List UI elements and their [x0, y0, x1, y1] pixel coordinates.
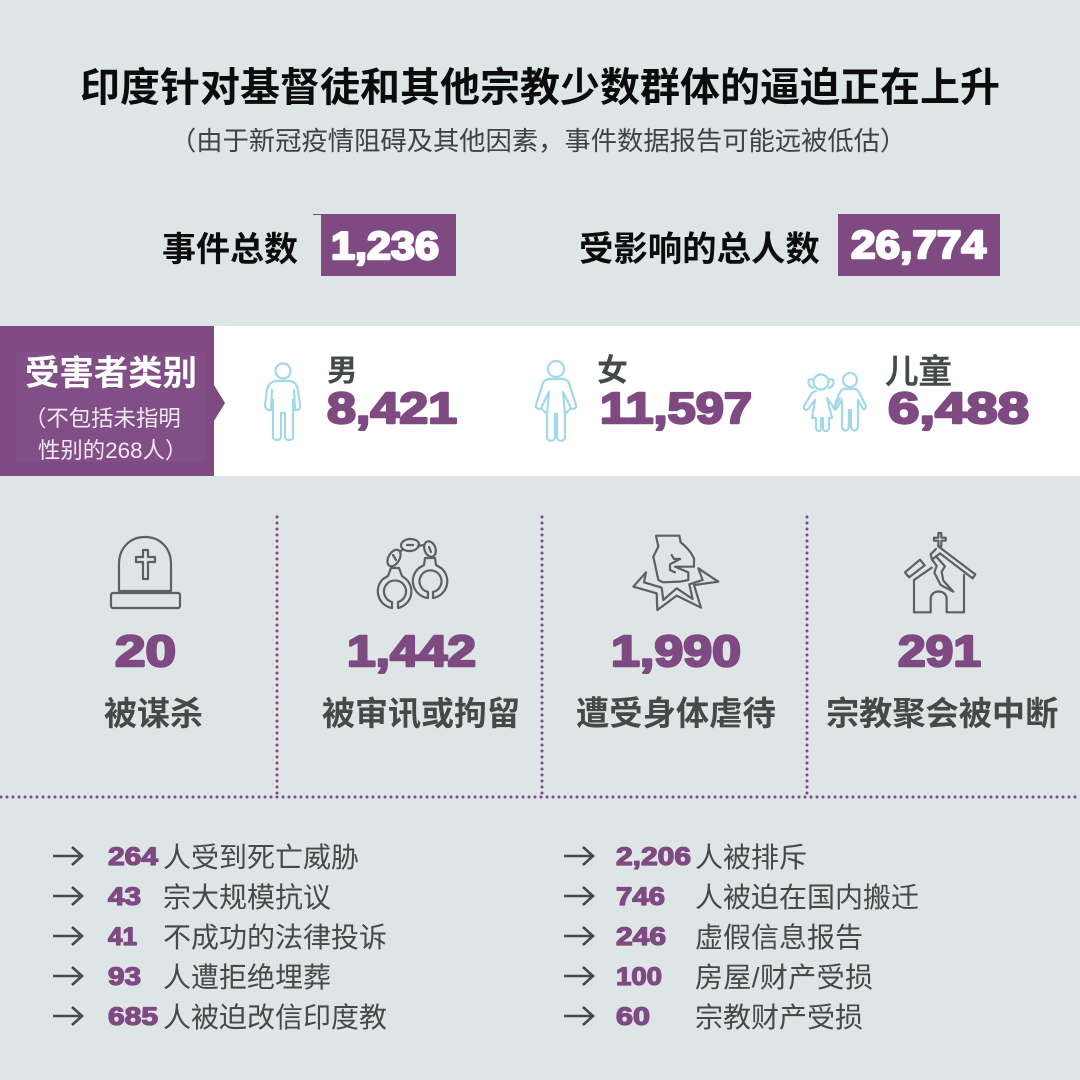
row: internally displaced: 746 [616, 883, 665, 911]
abuse label: 遭受身体虐待 [576, 696, 776, 733]
list: right column [564, 842, 919, 1033]
total incidents value: 1,236 [331, 225, 439, 268]
row: forced conversion: 685 [108, 1003, 158, 1031]
row: death threats: 人受到死亡威胁 [163, 842, 359, 873]
row: internally displaced [564, 882, 919, 913]
row: forced conversion: 人被迫改信印度教 [163, 1002, 387, 1033]
stat: physical abuse [576, 536, 776, 733]
killed label: 被谋杀 [104, 695, 203, 732]
icon: cracked church [905, 533, 975, 612]
gatherings label: 宗教聚会被中断 [826, 696, 1058, 733]
icon: fist impact [633, 536, 718, 610]
purple category tab [0, 326, 225, 476]
row: homes damaged: 房屋/财产受损 [695, 962, 873, 993]
male value: 8,421 [327, 384, 457, 433]
panel: victim categories [0, 326, 1080, 476]
total people affected [579, 214, 1000, 276]
icon: children [804, 373, 866, 431]
list: left column [53, 842, 387, 1033]
total people value box [838, 214, 1000, 276]
stat: interrogated or detained [322, 538, 520, 732]
inner tab tint [16, 352, 205, 462]
row: internally displaced: 人被迫在国内搬迁 [695, 882, 919, 913]
children label: 儿童 [885, 354, 952, 391]
row: failed complaints [53, 922, 387, 953]
total incidents label: 事件总数 [162, 231, 298, 269]
icon: man [265, 364, 300, 440]
row: religious property damaged: 宗教财产受损 [695, 1002, 863, 1033]
total incidents value box [313, 214, 456, 276]
row: death threats: 264 [108, 843, 158, 871]
row: death threats [53, 842, 359, 873]
row: mass protests [53, 882, 331, 913]
gatherings value: 291 [898, 627, 981, 676]
row: ostracised: 2,206 [616, 843, 691, 871]
detained value: 1,442 [347, 627, 476, 676]
row: mass protests: 宗大规模抗议 [163, 882, 331, 913]
row: failed complaints: 不成功的法律投诉 [163, 922, 387, 953]
icon: woman [536, 361, 576, 441]
row: ostracised: 人被排斥 [695, 842, 807, 873]
row: burial refused: 人遭拒绝埋葬 [163, 962, 331, 993]
category note line 1: （不包括未指明 [24, 406, 181, 431]
white band [214, 326, 1080, 476]
category note line 2: 性别的268人） [38, 438, 187, 463]
row: forced conversion [53, 1002, 387, 1033]
row: religious property damaged: 60 [616, 1003, 650, 1031]
total people value: 26,774 [851, 224, 986, 267]
row: false reports: 246 [616, 923, 666, 951]
abuse value: 1,990 [611, 627, 741, 676]
row: mass protests: 43 [108, 883, 141, 911]
icon: tombstone [111, 537, 180, 608]
title: 印度针对基督徒和其他宗教少数群体的逼迫正在上升 [80, 66, 1000, 110]
row: homes damaged: 100 [616, 963, 662, 991]
total people label: 受影响的总人数 [579, 231, 820, 269]
total incidents [162, 214, 456, 276]
subtitle: （由于新冠疫情阻碍及其他因素，事件数据报告可能远被低估） [170, 126, 906, 156]
row: religious property damaged [564, 1002, 863, 1033]
detained label: 被审讯或拘留 [322, 695, 520, 732]
row: false reports: 虚假信息报告 [695, 922, 863, 953]
row: homes damaged [564, 962, 873, 993]
icon: handcuffs [378, 538, 447, 608]
row: failed complaints: 41 [108, 923, 137, 951]
killed value: 20 [115, 627, 176, 676]
row: burial refused [53, 962, 331, 993]
stat: gatherings disrupted [826, 533, 1058, 733]
female label: 女 [597, 353, 628, 388]
stat: killed [104, 537, 203, 732]
female value: 11,597 [600, 384, 752, 433]
category heading: 受害者类别 [25, 355, 197, 393]
male label: 男 [327, 354, 358, 388]
row: ostracised [564, 842, 807, 873]
row: burial refused: 93 [108, 963, 141, 991]
row: false reports [564, 922, 863, 953]
children value: 6,488 [888, 384, 1029, 433]
